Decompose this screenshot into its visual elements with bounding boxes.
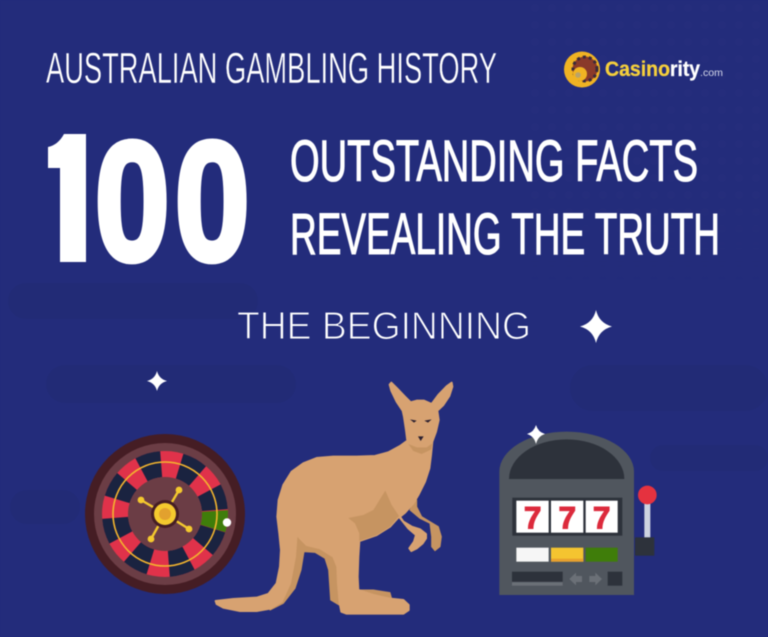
logo: Casinority: [564, 52, 723, 88]
big number 100: 1: [30, 107, 116, 297]
logo: Casinority: Casino: [605, 58, 670, 81]
big number 100: 0: [174, 107, 250, 297]
icon: slot machine: 7: [559, 499, 576, 535]
logo: Casinority: rity: [670, 58, 700, 81]
logo: Casinority: .com: [700, 67, 723, 79]
icon: sparkle large: [580, 310, 612, 343]
big number 100: 0: [94, 107, 170, 297]
subheading: the beginning: THE BEGINNING: [237, 305, 531, 348]
icon: sparkle on slot machine: [527, 425, 545, 444]
icon: slot machine: [499, 432, 657, 595]
icon: kangaroo: [216, 383, 452, 614]
icon: roulette wheel: [85, 434, 245, 594]
icon: slot machine: 7: [593, 499, 610, 535]
icon: sparkle small left: [147, 371, 167, 391]
big number 100: [47, 133, 248, 266]
title: AUSTRALIAN GAMBLING HISTORY: [46, 44, 497, 93]
icon: slot machine: 7: [524, 499, 541, 535]
